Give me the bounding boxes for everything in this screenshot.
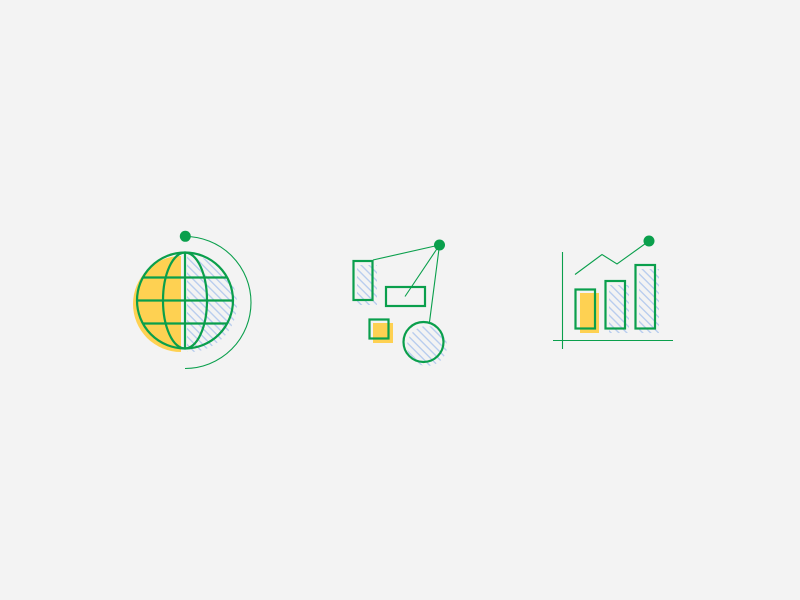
globe outline and grid [137, 252, 233, 348]
square yellow shadow [373, 323, 393, 343]
connector lines [373, 245, 440, 322]
tall rectangle hatch [357, 265, 377, 305]
bars [576, 265, 655, 328]
yellow bar shadow [580, 293, 599, 333]
globe yellow shadow [133, 256, 181, 352]
orbit dot [180, 231, 191, 242]
orbit arc [185, 236, 251, 368]
bar hatches [609, 285, 629, 333]
circle hatch [407, 326, 447, 366]
network dot [434, 240, 445, 250]
globe hatched shadow [187, 256, 237, 352]
axes [553, 252, 673, 349]
shape outlines [354, 261, 444, 362]
illustration: three line icons [133, 230, 673, 369]
trend dot [644, 236, 654, 246]
icon: globe [133, 231, 251, 368]
icon: bar chart [553, 236, 673, 349]
trend line [575, 241, 649, 274]
icon: shapes network [354, 240, 447, 366]
